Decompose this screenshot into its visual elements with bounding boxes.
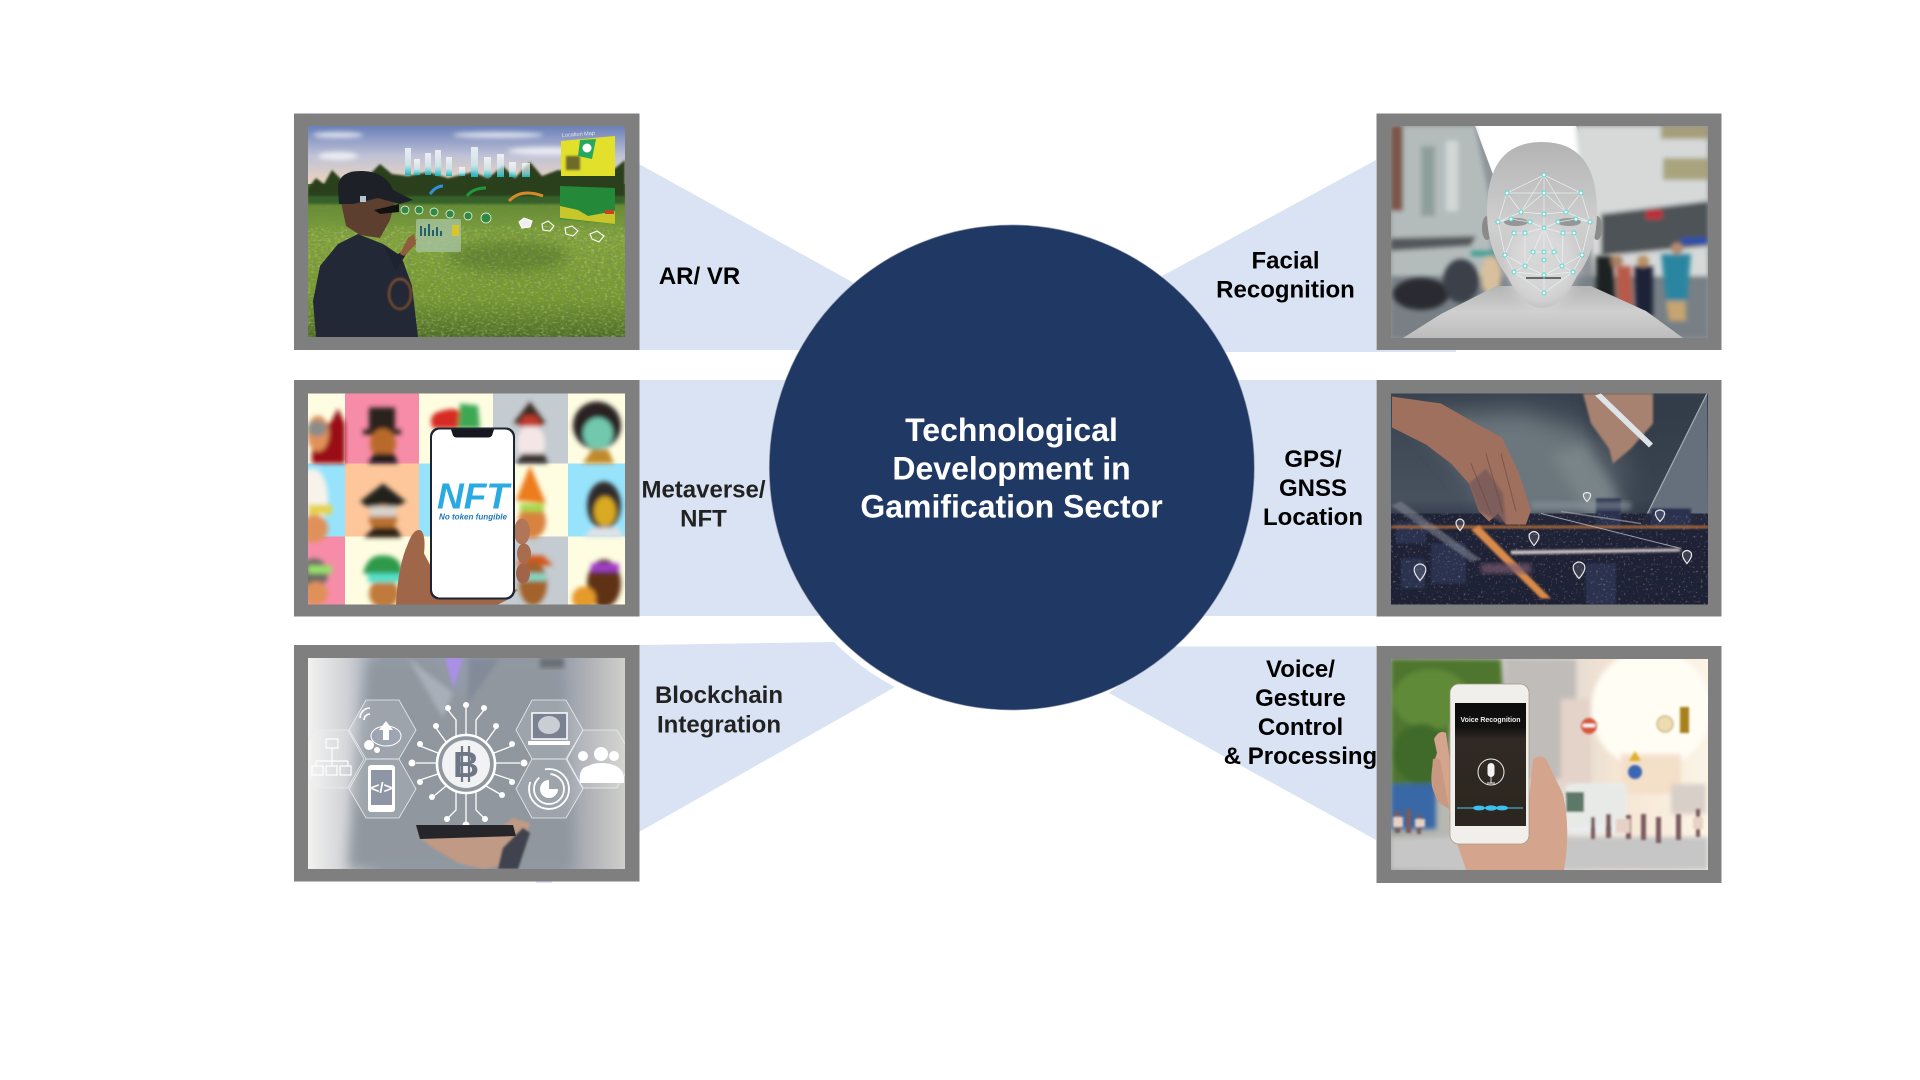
icon: cloud upload <box>360 708 401 753</box>
label: Metaverse/ NFT: NFT <box>680 506 727 532</box>
NFT logo: NFT <box>437 476 512 516</box>
icon: microphone <box>1478 759 1504 785</box>
tablet light streak <box>1511 548 1681 554</box>
panel: Voice/Gesture photo frame <box>1376 646 1722 883</box>
icon: network tree <box>312 739 351 775</box>
laptop lid <box>1642 394 1708 524</box>
gauges <box>430 186 543 201</box>
wedge: Blockchain connector <box>639 642 895 832</box>
label: Voice/ Gesture Control & Processing: Control <box>1258 714 1343 741</box>
hand <box>1392 396 1531 524</box>
hexagon icons <box>519 218 604 242</box>
photo: facial recognition mesh <box>1391 126 1708 338</box>
pen hand <box>1583 394 1653 464</box>
label: Voice/ Gesture Control & Processing: & Processing <box>1224 743 1377 770</box>
wedge: Metaverse/NFT connector <box>639 380 830 616</box>
hand behind phone <box>396 518 531 604</box>
heat map overlay <box>560 186 615 224</box>
tiny tick under frame <box>536 882 552 883</box>
icon: pie chart rings <box>529 769 569 809</box>
wedge: AR/VR connector <box>639 164 854 350</box>
label: GPS/ GNSS Location: GNSS <box>1279 475 1347 502</box>
label: Facial Recognition: Facial <box>1251 248 1320 274</box>
icon: bitcoin circuit: B <box>453 744 479 785</box>
wedge: Facial Recognition connector <box>1162 160 1456 352</box>
title: Development in <box>892 450 1131 486</box>
label: Voice/ Gesture Control & Processing: Voice/ <box>1266 656 1335 683</box>
location map overlay <box>561 131 615 176</box>
hexagon icons <box>298 700 634 818</box>
icon: bitcoin circuit <box>408 702 528 828</box>
label: Metaverse/ NFT: Metaverse/ <box>641 476 766 504</box>
smartphone <box>1450 684 1529 844</box>
icon: laptop brain <box>528 713 570 745</box>
title: Gamification Sector <box>860 488 1163 524</box>
bar chart overlay <box>405 147 530 177</box>
wedge: GPS connector <box>1190 380 1376 616</box>
wedge: Voice connector <box>1109 646 1376 840</box>
map pins <box>1414 492 1692 580</box>
photo: phone voice recognition in street <box>1391 659 1708 870</box>
photo: bitcoin network over suit <box>308 658 625 869</box>
photo: hands, laptop and city map pins <box>1391 394 1708 604</box>
label: GPS/ GNSS Location: Location <box>1263 504 1363 531</box>
bus and crowd <box>1393 784 1703 843</box>
panel: Blockchain photo frame <box>294 645 640 883</box>
label: Facial Recognition: Recognition <box>1216 276 1355 304</box>
label: AR/ VR: AR/ VR <box>659 263 740 290</box>
title: Technological <box>905 412 1118 448</box>
label: Blockchain Integration: Integration <box>657 712 781 738</box>
man <box>313 171 418 337</box>
silver bust <box>1403 142 1683 338</box>
photo: NFT phone with ape collectibles <box>308 394 625 604</box>
hand <box>1431 732 1567 870</box>
screen text: Voice Recognition <box>1460 717 1520 724</box>
face mesh <box>1496 173 1592 295</box>
voice waveform <box>1457 805 1523 811</box>
icon row <box>401 206 491 223</box>
central circle with title <box>769 225 1254 710</box>
icon: code phone <box>368 765 395 812</box>
panel: GPS/GNSS photo frame <box>1376 380 1722 616</box>
panel: Metaverse/NFT photo frame <box>294 380 640 616</box>
hand with tablet <box>416 818 530 869</box>
ape characters <box>296 402 625 610</box>
icon: team <box>578 747 624 783</box>
icon: code phone: </> <box>371 780 393 797</box>
street signs <box>1581 707 1689 779</box>
photo: farmer with AR overlay <box>308 126 625 337</box>
smartphone: No token fungible <box>439 512 508 522</box>
smartphone <box>430 428 515 600</box>
label: GPS/ GNSS Location: GPS/ <box>1284 446 1342 473</box>
panel: AR/VR photo frame <box>294 114 640 350</box>
city layer <box>1391 498 1708 604</box>
small floating panel <box>416 219 461 252</box>
label: Voice/ Gesture Control & Processing: Gesture <box>1255 685 1346 712</box>
panel: Facial Recognition photo frame <box>1376 114 1722 350</box>
label: Blockchain Integration: Blockchain <box>655 682 783 709</box>
location map overlay: Location Map <box>562 131 595 139</box>
